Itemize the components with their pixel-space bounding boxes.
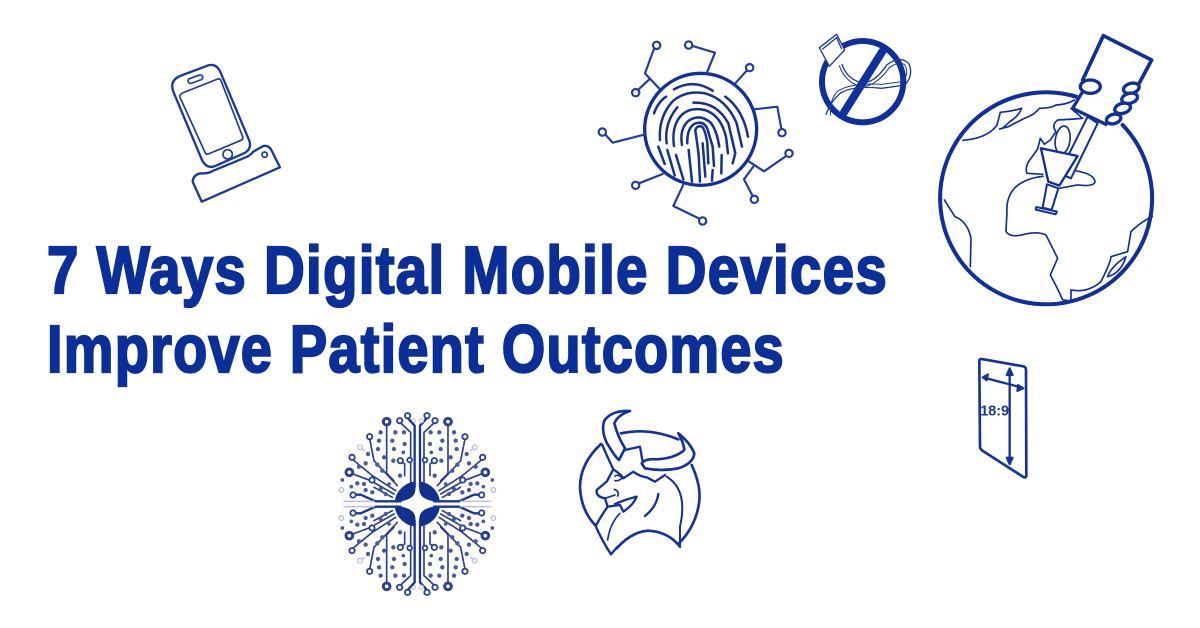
title — [47, 233, 888, 387]
ratio label: 18:9 — [980, 404, 1009, 420]
icon: 18:9 screen ratio device — [979, 359, 1026, 477]
continents — [944, 100, 1152, 301]
icon: fingerprint with circuit nodes — [599, 41, 793, 225]
hand holding card — [1073, 36, 1152, 125]
icon: crossed-out cable — [819, 34, 911, 122]
syringe — [1036, 117, 1098, 214]
fingerprint ridges — [654, 84, 748, 182]
title: Improve Patient Outcomes — [47, 312, 785, 387]
icon: circuit brain radial — [339, 413, 496, 595]
circuit nodes — [599, 41, 793, 225]
neck — [596, 507, 618, 554]
icon: phone on dock — [172, 65, 280, 202]
globe outline — [940, 92, 1152, 304]
icon: globe with hand and syringe — [940, 36, 1152, 304]
circle arcs — [621, 431, 678, 439]
prohibition sign — [822, 41, 903, 122]
head — [597, 445, 637, 512]
horns — [603, 411, 630, 460]
title: 7 Ways Digital Mobile Devices — [47, 233, 888, 308]
icon: bull in circle — [580, 411, 700, 554]
fingerprint circle — [645, 73, 757, 185]
cable — [819, 34, 911, 115]
